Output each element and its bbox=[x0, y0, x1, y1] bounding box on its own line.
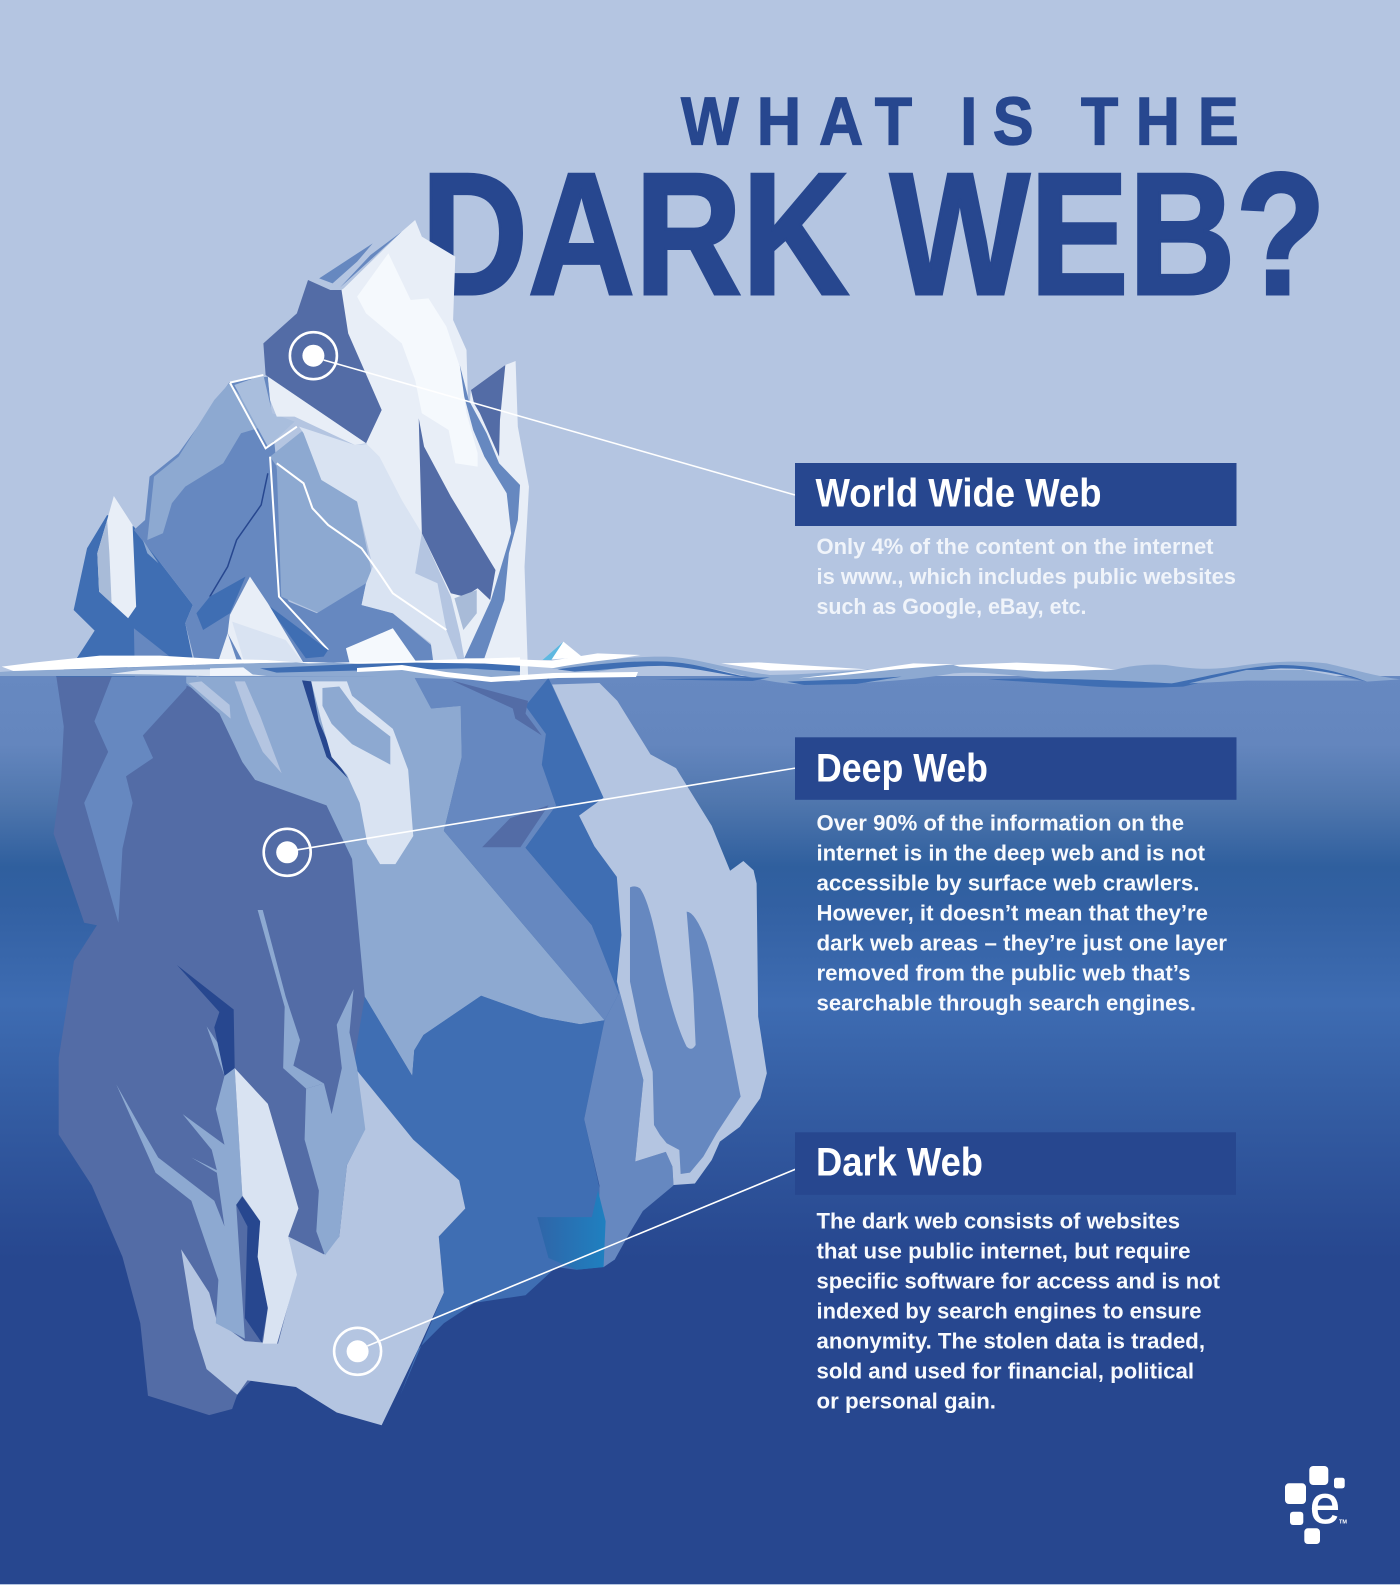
blue wave underside bbox=[988, 665, 1367, 688]
body text: World Wide Web bbox=[816, 534, 1236, 619]
underwater upper right facet bbox=[413, 675, 620, 1020]
body text: Deep Web: However, it doesn’t mean that they’re bbox=[816, 901, 1208, 926]
panel: Deep Web bbox=[795, 737, 1236, 1016]
waterline: right waves bbox=[483, 653, 1400, 688]
leader line: World Wide Web bbox=[324, 360, 795, 495]
distant floe blue face bbox=[542, 642, 563, 660]
centre drip bbox=[305, 989, 365, 1255]
waterline: lower white wave bbox=[357, 665, 638, 682]
bottom blue patch left bbox=[196, 577, 246, 630]
right dark wedge bbox=[471, 365, 505, 457]
body text: Dark Web: that use public internet, but require bbox=[816, 1238, 1190, 1263]
main left face bbox=[134, 377, 339, 677]
panel: World Wide Web bbox=[795, 463, 1236, 619]
body text: Dark Web bbox=[816, 1208, 1220, 1413]
distant floe bbox=[542, 642, 583, 660]
back right spike bbox=[464, 361, 529, 677]
low left lighter facet bbox=[134, 628, 196, 677]
bright facet bbox=[235, 1068, 298, 1344]
blue stripe bbox=[260, 663, 520, 673]
heading: World Wide Web: World Wide Web bbox=[816, 472, 1102, 516]
underwater centre facet bbox=[186, 675, 605, 1076]
peak dark patch bbox=[263, 280, 382, 443]
heading: Dark Web: Dark Web bbox=[816, 1141, 983, 1185]
bottom right white block bbox=[346, 628, 420, 667]
bottom edge line bbox=[0, 1584, 1400, 1585]
white ice edge bbox=[2, 656, 520, 671]
pale lower wave bbox=[110, 668, 267, 676]
grey blue wave bbox=[552, 657, 1400, 686]
body text: Dark Web: indexed by search engines to ensure bbox=[816, 1298, 1202, 1323]
marker: Deep Web bbox=[264, 829, 311, 876]
crevice grey facet bbox=[454, 590, 477, 630]
underwater right inner facet bbox=[630, 886, 741, 1174]
small spike shadow bbox=[97, 520, 112, 603]
peak blue sliver right bbox=[340, 232, 402, 287]
white cracks and edges bbox=[210, 375, 446, 650]
central dark crevice bbox=[419, 418, 496, 600]
grey blue band bbox=[0, 662, 520, 682]
bottom far left shard bbox=[217, 633, 239, 667]
body text: Deep Web: dark web areas – they’re just one layer bbox=[816, 931, 1227, 956]
underwater right lower facet bbox=[584, 981, 673, 1267]
leader line: Deep Web bbox=[298, 768, 796, 850]
top bright drip bbox=[311, 681, 413, 864]
iceberg: above water bbox=[56, 220, 583, 677]
navy crevice upper bbox=[177, 965, 235, 1076]
pale sliver 1 bbox=[189, 681, 231, 719]
dark shadow top right bbox=[452, 680, 542, 736]
body text: Deep Web bbox=[816, 811, 1227, 1016]
title bbox=[421, 82, 1326, 331]
blue stripe bbox=[655, 677, 770, 681]
underwater right pale wall bbox=[552, 683, 767, 1185]
teal glow bbox=[537, 1191, 606, 1270]
white wave one bbox=[721, 662, 867, 671]
heading bar: Dark Web bbox=[795, 1132, 1236, 1195]
dark shadow middle bbox=[482, 805, 548, 847]
body text: Deep Web: Over 90% of the information on the bbox=[816, 811, 1184, 836]
white wave two bbox=[954, 663, 1114, 672]
body text: World Wide Web: such as Google, eBay, etc. bbox=[816, 594, 1086, 619]
body text: Dark Web: specific software for access and is not bbox=[816, 1268, 1220, 1293]
body text: World Wide Web: Only 4% of the content on the internet bbox=[816, 534, 1214, 559]
body text: Deep Web: removed from the public web that’s bbox=[816, 961, 1190, 986]
heading: Deep Web: Deep Web bbox=[816, 746, 988, 790]
underwater deep blue body bbox=[352, 996, 615, 1395]
heading bar: World Wide Web bbox=[795, 463, 1236, 526]
blue dash middle bbox=[787, 677, 902, 685]
thin sliver bbox=[258, 910, 324, 1089]
logo: e mark bbox=[1285, 1466, 1347, 1544]
peak blue sliver left bbox=[319, 243, 373, 283]
shoulder bright facet bbox=[268, 377, 366, 445]
leader line: Dark Web bbox=[367, 1169, 796, 1346]
underwater left light facet bbox=[84, 675, 189, 923]
drip inner facet bbox=[322, 687, 390, 765]
underwater left dark mass bbox=[54, 675, 367, 1415]
shoulder pale strip bbox=[234, 375, 295, 447]
heading bar: Deep Web bbox=[795, 737, 1236, 800]
background: sea gradient bbox=[0, 676, 1400, 1585]
lower left branching facet bbox=[116, 1026, 245, 1339]
left low dark chunk bbox=[56, 515, 196, 677]
bottom small spike lower face bbox=[232, 622, 306, 667]
right blue strip bbox=[460, 365, 520, 658]
bright wave fragment bbox=[210, 667, 253, 676]
right pale face bbox=[299, 427, 464, 677]
navy crevice lower bbox=[236, 1197, 268, 1343]
body text: Dark Web: The dark web consists of websites bbox=[816, 1208, 1180, 1233]
centre face bbox=[270, 430, 373, 613]
blue wave shadow bbox=[557, 661, 755, 678]
centre lower face bbox=[277, 583, 435, 677]
logo: e mark: TM bbox=[1339, 1520, 1347, 1526]
white ice edge bbox=[483, 653, 641, 668]
body text: Dark Web: sold and used for financial, political bbox=[816, 1358, 1194, 1383]
background: sky bbox=[0, 0, 1400, 677]
lighter wave underside bbox=[1189, 670, 1361, 683]
bottom small spike bbox=[228, 577, 306, 667]
small left spike bbox=[97, 496, 136, 618]
body text: World Wide Web: is www., which includes public websites bbox=[816, 564, 1236, 589]
bottom blue patch right bbox=[266, 603, 328, 658]
body text: Deep Web: internet is in the deep web and is not bbox=[816, 841, 1205, 866]
body text: Deep Web: searchable through search engines. bbox=[816, 991, 1196, 1016]
upper white column bbox=[341, 220, 511, 658]
navy crack top bbox=[302, 680, 348, 778]
body text: Dark Web: or personal gain. bbox=[816, 1388, 996, 1413]
logo: e mark: e bbox=[1310, 1475, 1340, 1535]
pale lower facet bbox=[181, 1071, 465, 1425]
marker: Dark Web bbox=[334, 1328, 381, 1375]
panel: Dark Web bbox=[795, 1132, 1236, 1413]
body text: Dark Web: anonymity. The stolen data is traded, bbox=[816, 1328, 1205, 1353]
title line: WHAT IS THE: WHATISTHE bbox=[681, 82, 1239, 159]
waterline: left bbox=[0, 656, 520, 682]
body text: Deep Web: accessible by surface web crawlers. bbox=[816, 871, 1200, 896]
left upper lighter band bbox=[147, 383, 263, 540]
left sliver bbox=[136, 530, 158, 563]
underwater upper blue strip bbox=[526, 678, 622, 997]
brightest highlight bbox=[357, 253, 478, 467]
marker: World Wide Web bbox=[290, 332, 337, 379]
white wave three bbox=[799, 663, 954, 678]
pale sliver 2 bbox=[235, 681, 282, 773]
iceberg: underwater part bbox=[54, 675, 767, 1425]
